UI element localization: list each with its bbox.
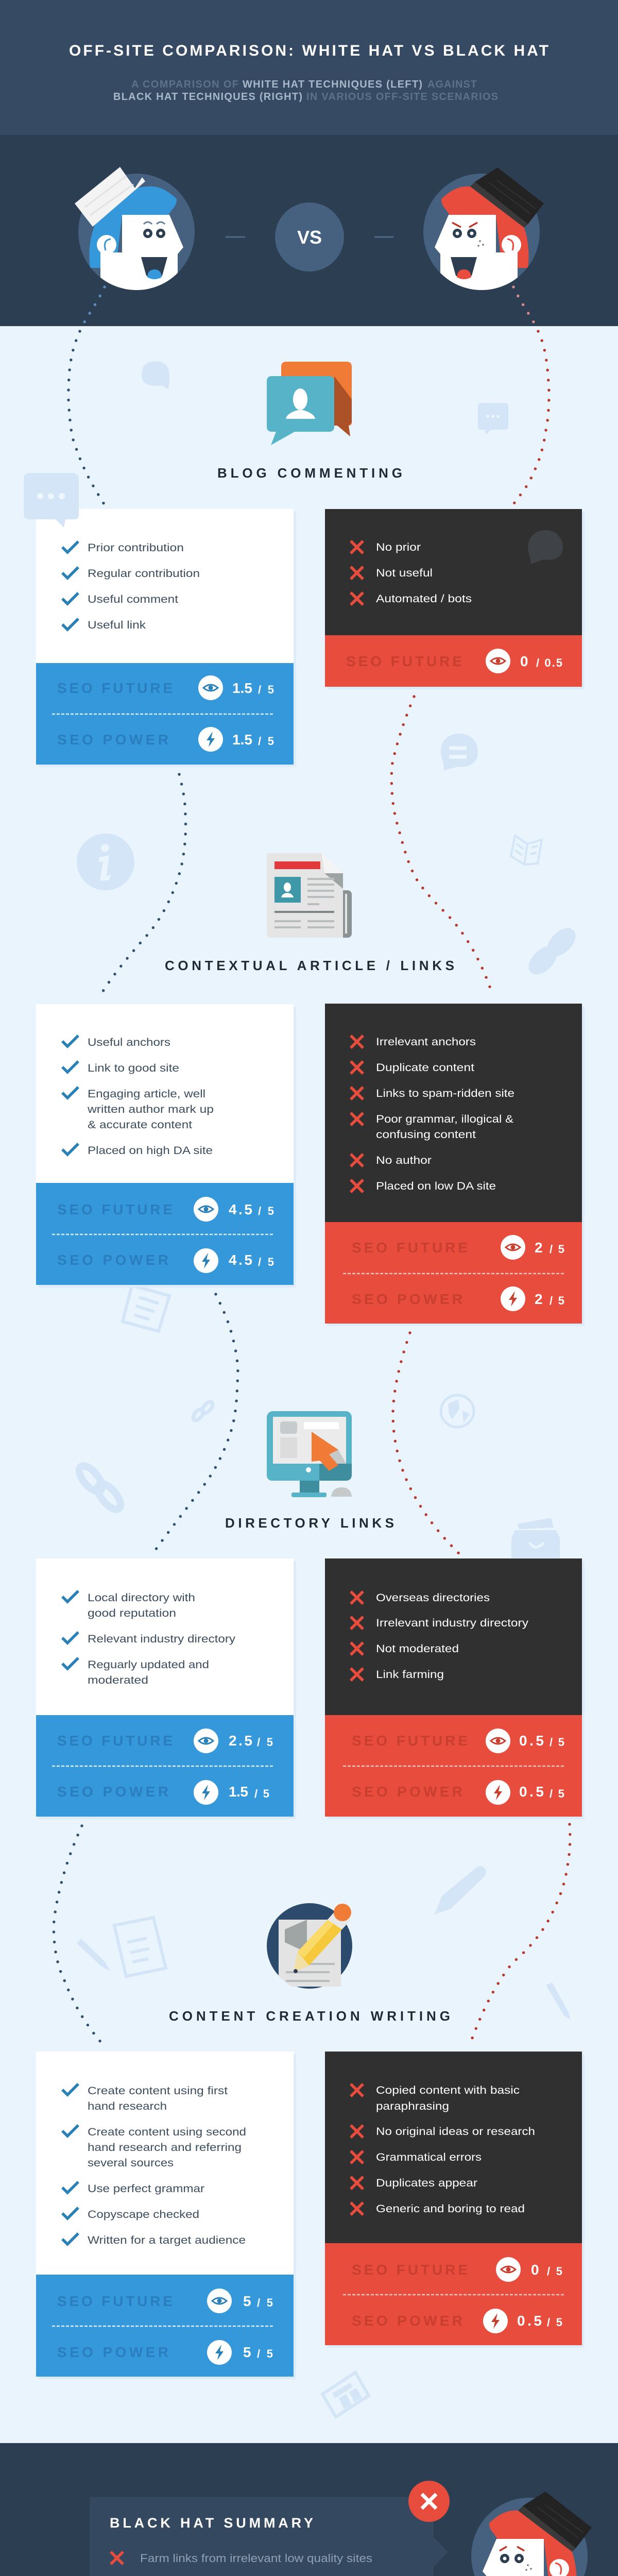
list: black hat content: Generic and boring to read	[376, 2203, 525, 2215]
list: black hat contextual: confusing content	[376, 1129, 476, 1141]
score: seo power	[57, 1780, 269, 1805]
score: seo power	[57, 2340, 273, 2365]
score: seo future: 0	[520, 653, 528, 669]
icon: content writing	[267, 1903, 352, 1989]
heading: blog commenting: BLOG COMMENTING	[217, 465, 402, 481]
score: seo power: / 5	[550, 1787, 564, 1800]
list: black hat summary: Farm links from irrelevant low quality sites	[140, 2552, 372, 2565]
panel: content black hat	[325, 2052, 585, 2348]
list: white hat directory: good reputation	[88, 1607, 176, 1619]
title: OFF-SITE COMPARISON: WHITE HAT VS BLACK HAT	[69, 42, 548, 59]
heading: black hat summary: BLACK HAT SUMMARY	[110, 2515, 313, 2531]
score: seo future: 4.5	[229, 1201, 252, 1217]
icon: dark bubble	[528, 530, 563, 564]
list: white hat content: Copyscape checked	[88, 2209, 199, 2221]
score: seo power: SEO POWER	[57, 732, 168, 748]
heading: content creation writing: CONTENT CREATION WRITING	[169, 2008, 450, 2024]
list: white hat contextual: Placed on high DA site	[88, 1145, 213, 1157]
list: black hat blog	[351, 541, 472, 605]
score: seo power: 2	[535, 1291, 543, 1307]
list: black hat content: paraphrasing	[376, 2100, 449, 2112]
decor: speech bubble with lines	[441, 734, 478, 771]
decor: speech bubble top left	[142, 361, 169, 389]
decor: small chain	[191, 1400, 215, 1422]
black hat character	[423, 167, 544, 294]
decor: info circle	[77, 834, 134, 890]
score: seo power: 5	[243, 2344, 251, 2360]
score: seo power: / 5	[254, 1787, 269, 1800]
score: seo future: SEO FUTURE	[57, 680, 173, 696]
list: black hat summary	[111, 2552, 372, 2576]
score: seo future: / 5	[550, 1736, 564, 1749]
list: white hat content	[62, 2084, 246, 2246]
list: black hat content	[351, 2084, 535, 2215]
icon: monitor with cursor	[267, 1411, 352, 1497]
score: seo future	[57, 2289, 273, 2313]
list: white hat blog: Useful link	[88, 619, 146, 631]
dotted path: black hat contextual to directory	[393, 1333, 463, 1557]
dotted path: black hat in header	[513, 287, 536, 326]
list: black hat content: No original ideas or research	[376, 2126, 535, 2138]
score: seo future: SEO FUTURE	[352, 1733, 468, 1749]
list: white hat content: Create content using second	[88, 2126, 246, 2138]
list: black hat directory: Link farming	[376, 1669, 444, 1681]
list: white hat blog: Prior contribution	[88, 542, 184, 554]
list: black hat content: Duplicates appear	[376, 2177, 477, 2189]
score: seo future: / 5	[257, 1736, 273, 1749]
panel: blog commenting white hat	[36, 509, 296, 767]
list: black hat directory: Overseas directories	[376, 1592, 490, 1604]
list: black hat blog: Automated / bots	[376, 593, 472, 605]
icon: newspaper	[267, 853, 352, 938]
panel: directory white hat	[36, 1558, 296, 1819]
score: seo power: / 5	[257, 2347, 273, 2360]
dotted path: white hat contextual to directory	[152, 1294, 238, 1555]
score: seo future: / 5	[257, 2296, 273, 2309]
panel: contextual white hat	[36, 1004, 296, 1287]
score: seo future: / 5	[550, 1243, 564, 1256]
list: black hat contextual	[351, 1036, 514, 1192]
score: seo future: 2	[535, 1240, 543, 1256]
score: seo future: SEO FUTURE	[346, 653, 462, 669]
score: seo future	[57, 675, 274, 700]
score: seo future	[352, 1728, 564, 1753]
list: black hat contextual: Duplicate content	[376, 1062, 474, 1074]
score: seo future: / 0.5	[536, 656, 562, 669]
score: seo power: 0.5	[519, 1784, 544, 1800]
decor: pencil right	[546, 1982, 571, 2020]
list: white hat contextual: & accurate content	[88, 1119, 192, 1131]
panel: contextual black hat	[325, 1004, 585, 1326]
list: black hat directory: Irrelevant industry directory	[376, 1617, 529, 1629]
score: seo power: SEO POWER	[57, 1784, 168, 1800]
decor: file box	[511, 1518, 560, 1558]
list: white hat contextual: Link to good site	[88, 1062, 179, 1074]
score: seo power: SEO POWER	[352, 1291, 462, 1307]
footer band	[0, 2443, 618, 2576]
panel: blog commenting black hat	[325, 509, 585, 689]
score: seo future: SEO FUTURE	[352, 1240, 468, 1256]
list: black hat directory	[351, 1591, 529, 1681]
black hat character: scared	[471, 2492, 592, 2576]
score: seo future: / 5	[258, 683, 274, 696]
score: seo power: 4.5	[229, 1252, 252, 1268]
score: seo future: SEO FUTURE	[57, 1201, 173, 1217]
score: seo power: / 5	[547, 2316, 562, 2329]
score: seo power: 1.5	[232, 732, 252, 748]
list: white hat content: several sources	[88, 2157, 174, 2169]
score: seo power	[57, 1248, 274, 1273]
score: seo future: SEO FUTURE	[57, 1733, 173, 1749]
list: white hat directory: Reguarly updated and	[88, 1659, 209, 1671]
subtitle: BLACK HAT TECHNIQUES (RIGHT)	[113, 91, 302, 103]
dotted path: black hat to blog commenting	[513, 331, 549, 505]
score: seo future	[352, 2257, 562, 2282]
score: seo future: 1.5	[232, 680, 252, 696]
score: seo power	[352, 2309, 562, 2333]
score: seo future: / 5	[258, 1205, 274, 1217]
score: seo future	[57, 1728, 273, 1753]
score: seo future: 0	[531, 2262, 539, 2278]
list: white hat directory: Local directory with	[88, 1592, 195, 1604]
list: white hat blog: Useful comment	[88, 594, 178, 605]
list: white hat content: Written for a target audience	[88, 2234, 246, 2246]
list: white hat directory: Relevant industry directory	[88, 1633, 236, 1645]
score: seo future: 5	[243, 2293, 251, 2309]
score: seo power: SEO POWER	[352, 1784, 462, 1800]
decor: document with lines	[114, 1918, 166, 1976]
vs badge	[226, 202, 393, 272]
decor: pen	[435, 1866, 486, 1914]
list: white hat contextual: Useful anchors	[88, 1037, 170, 1048]
decor: document under contextual card	[123, 1285, 169, 1331]
decor: bubble with dots	[478, 403, 508, 434]
score: seo future: / 5	[547, 2265, 562, 2278]
list: white hat content: Create content using first	[88, 2085, 228, 2097]
list: black hat contextual: Links to spam-ridden site	[376, 1088, 514, 1099]
score: seo power	[352, 1286, 564, 1311]
list: black hat contextual: No author	[376, 1155, 432, 1166]
decor: globe	[441, 1395, 474, 1427]
list: white hat blog	[62, 541, 200, 631]
decor: open book	[511, 836, 542, 865]
score: seo power	[352, 1780, 564, 1805]
list: black hat contextual: Placed on low DA site	[376, 1180, 496, 1192]
score: seo future: SEO FUTURE	[352, 2262, 468, 2278]
list: black hat contextual: Irrelevant anchors	[376, 1036, 476, 1048]
score: seo power: SEO POWER	[57, 1252, 168, 1268]
score: seo future	[346, 649, 562, 673]
decor: big chain left	[75, 1462, 125, 1513]
subtitle: IN VARIOUS OFF-SITE SCENARIOS	[306, 91, 498, 103]
score: seo power: / 5	[258, 1256, 274, 1268]
dotted path: white hat in header	[82, 287, 105, 326]
score: seo future	[57, 1197, 274, 1222]
score: seo future	[352, 1235, 564, 1260]
decor: layout sheet	[322, 2372, 369, 2417]
score: seo future: 2.5	[229, 1733, 252, 1749]
white hat character	[75, 167, 195, 294]
dotted path: white hat to blog commenting	[68, 331, 105, 505]
score: seo power	[57, 727, 274, 752]
subtitle	[113, 79, 498, 103]
list: black hat contextual: Poor grammar, illogical &	[376, 1113, 513, 1125]
list: black hat content: Copied content with basic	[376, 2084, 520, 2096]
heading: directory links: DIRECTORY LINKS	[225, 1515, 394, 1531]
badge: red cross	[408, 2481, 450, 2522]
subtitle: A COMPARISON OF	[131, 79, 238, 90]
dotted path: white hat blog to contextual	[99, 774, 186, 997]
list: white hat content: Use perfect grammar	[88, 2183, 204, 2195]
list: white hat content: hand research	[88, 2100, 167, 2112]
list: white hat directory: moderated	[88, 1674, 148, 1686]
icon: chat bubbles	[267, 362, 352, 445]
list: white hat blog: Regular contribution	[88, 568, 200, 580]
dotted path: black hat directory to content	[469, 1824, 570, 2046]
subtitle: WHITE HAT TECHNIQUES (LEFT)	[243, 79, 422, 90]
panel: directory black hat	[325, 1558, 585, 1819]
score: seo power: 1.5	[229, 1784, 248, 1800]
heading: contextual article: CONTEXTUAL ARTICLE / LINKS	[165, 958, 454, 973]
panel: black hat summary	[90, 2481, 450, 2576]
vs badge: VS	[297, 227, 322, 248]
score: seo power: / 5	[258, 735, 274, 748]
score: seo future: SEO FUTURE	[57, 2293, 173, 2309]
list: white hat contextual	[62, 1036, 214, 1157]
list: white hat contextual: written author mark up	[87, 1104, 214, 1115]
decor: big bubble with dots	[24, 473, 79, 528]
header band	[0, 0, 618, 326]
list: white hat contextual: Engaging article, well	[88, 1088, 205, 1100]
score: seo power: SEO POWER	[352, 2313, 462, 2329]
decor: pencil left	[77, 1939, 110, 1971]
score: seo future: 0.5	[519, 1733, 544, 1749]
decor: chain link	[528, 928, 576, 975]
score: seo power: / 5	[550, 1294, 564, 1307]
list: black hat content: Grammatical errors	[376, 2151, 482, 2163]
subtitle: AGAINST	[427, 79, 477, 90]
list: black hat directory: Not moderated	[376, 1643, 459, 1655]
dotted path: white hat directory to content	[54, 1826, 105, 2046]
score: seo power: SEO POWER	[57, 2344, 168, 2360]
dotted path: black hat blog to contextual	[391, 697, 493, 996]
list: white hat content: hand research and referring	[88, 2142, 242, 2154]
list: black hat blog: Not useful	[376, 567, 433, 579]
list: white hat directory	[62, 1591, 236, 1686]
list: black hat blog: No prior	[376, 541, 421, 553]
panel: content white hat	[36, 2052, 296, 2379]
score: seo power: 0.5	[517, 2313, 542, 2329]
